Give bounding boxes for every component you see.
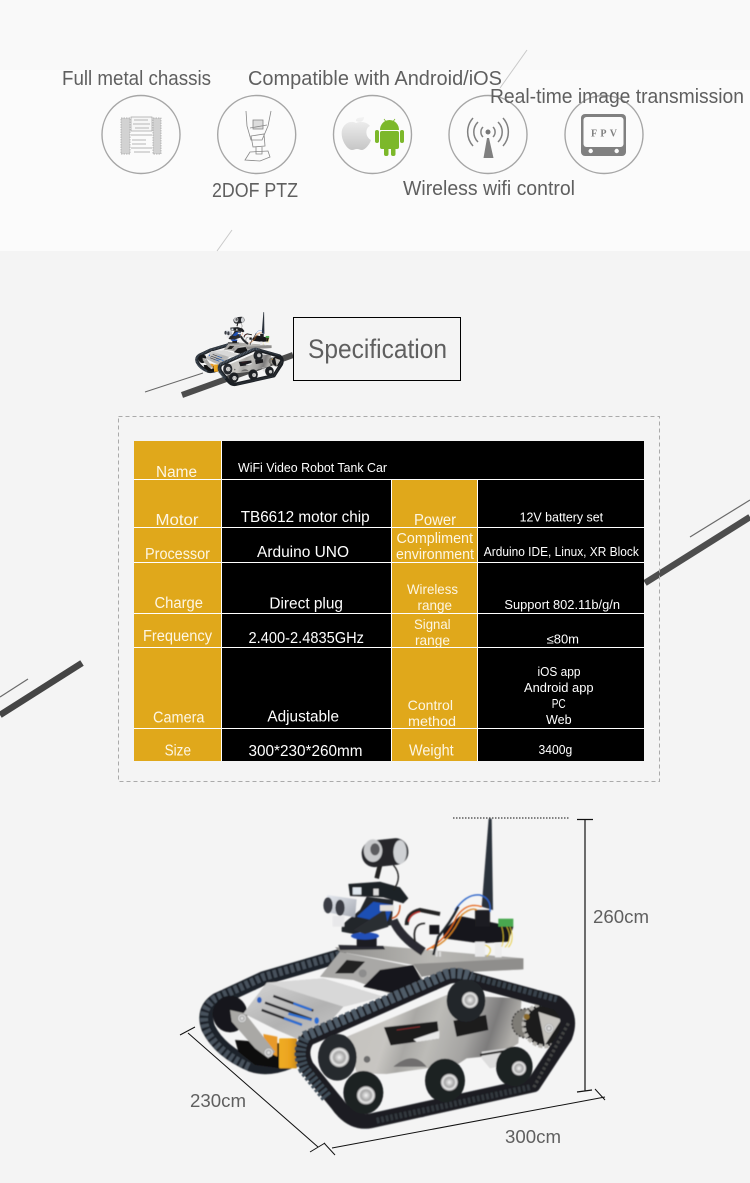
specification table xyxy=(134,441,644,761)
label: compatible with Android/iOS: Compatible with Android/iOS xyxy=(248,68,502,90)
feature: full metal chassis xyxy=(62,68,211,174)
icon: android logo xyxy=(375,119,404,156)
label: real-time image transmission: Real-time image transmission xyxy=(490,86,744,108)
icon: FPV screen: FPV xyxy=(591,128,618,140)
row: camera and control method: method xyxy=(408,713,456,729)
specification heading xyxy=(145,312,460,395)
row: frequency and signal range: 2.400-2.4835GHz xyxy=(248,630,364,647)
row: camera and control method: Adjustable xyxy=(267,708,339,726)
label: wireless wifi control: Wireless wifi control xyxy=(403,178,575,200)
row: processor and environment: Arduino UNO xyxy=(257,544,349,561)
row: processor and environment xyxy=(134,528,644,563)
row: camera and control method: Web xyxy=(546,713,572,727)
dimension: width 230cm: 230cm xyxy=(190,1091,246,1111)
dashed table frame xyxy=(118,416,660,782)
icon: chassis line art xyxy=(121,117,161,154)
row: processor and environment: Processor xyxy=(145,546,210,563)
row: name: Name xyxy=(156,464,197,481)
row: frequency and signal range: Signal xyxy=(414,616,451,632)
feature: wireless wifi control xyxy=(403,96,575,200)
label: 2DOF PTZ: 2DOF PTZ xyxy=(212,180,298,202)
feature: 2DOF PTZ xyxy=(212,96,298,202)
small robot illustration xyxy=(196,312,282,384)
row: processor and environment: Compliment xyxy=(396,531,473,547)
dimension: height 260cm xyxy=(453,818,649,1092)
row: size and weight: 3400g xyxy=(538,743,572,757)
heading text: Specification xyxy=(308,334,447,364)
heading box xyxy=(294,318,460,380)
row: charge and wireless range: Support 802.11b/g/n xyxy=(504,598,620,612)
row: motor and power: Motor xyxy=(156,512,198,529)
large robot tank car photo illustration xyxy=(204,819,568,1121)
dimension: length 300cm xyxy=(324,1089,605,1155)
top feature band xyxy=(0,0,750,251)
row: charge and wireless range xyxy=(134,563,644,613)
row: frequency and signal range: ≤80m xyxy=(547,633,579,647)
row: camera and control method: iOS app xyxy=(538,665,581,679)
row: processor and environment: Arduino IDE, Linux, XR Block xyxy=(484,545,640,559)
row: name xyxy=(134,441,644,481)
row: size and weight xyxy=(134,729,644,761)
row: name: WiFi Video Robot Tank Car xyxy=(238,461,387,475)
label: full metal chassis: Full metal chassis xyxy=(62,68,211,90)
row: camera and control method: PC xyxy=(552,697,566,711)
row: charge and wireless range: range xyxy=(418,597,452,613)
row: motor and power: 12V battery set xyxy=(520,511,604,525)
background accent strokes xyxy=(0,500,750,715)
row: camera and control method: Control xyxy=(408,697,453,713)
row: charge and wireless range: Wireless xyxy=(407,581,458,597)
row: charge and wireless range: Charge xyxy=(154,595,203,612)
row: camera and control method: Camera xyxy=(153,710,205,726)
icon: pan-tilt line art xyxy=(245,111,271,161)
row: camera and control method xyxy=(134,648,644,729)
row: frequency and signal range: Frequency xyxy=(143,628,212,645)
row: motor and power: TB6612 motor chip xyxy=(241,509,370,526)
row: frequency and signal range: range xyxy=(415,632,450,648)
dimension: length 300cm: 300cm xyxy=(505,1127,561,1147)
row: camera and control method: Android app xyxy=(524,681,594,695)
row: motor and power: Power xyxy=(414,512,456,529)
icon: FPV screen xyxy=(581,114,626,156)
icon: wifi mast xyxy=(468,118,508,158)
row: processor and environment: environment xyxy=(396,547,474,563)
row: frequency and signal range xyxy=(134,614,644,648)
row: size and weight: Size xyxy=(165,742,191,760)
feature: real-time image transmission xyxy=(490,86,744,174)
row: size and weight: 300*230*260mm xyxy=(248,743,362,760)
row: size and weight: Weight xyxy=(409,742,454,760)
row: charge and wireless range: Direct plug xyxy=(269,596,343,612)
feature: compatible with Android/iOS xyxy=(248,68,502,174)
icon: apple logo xyxy=(342,117,371,150)
dimension: height 260cm: 260cm xyxy=(593,907,649,927)
row: motor and power xyxy=(134,480,644,529)
dimension: width 230cm xyxy=(180,1027,325,1152)
